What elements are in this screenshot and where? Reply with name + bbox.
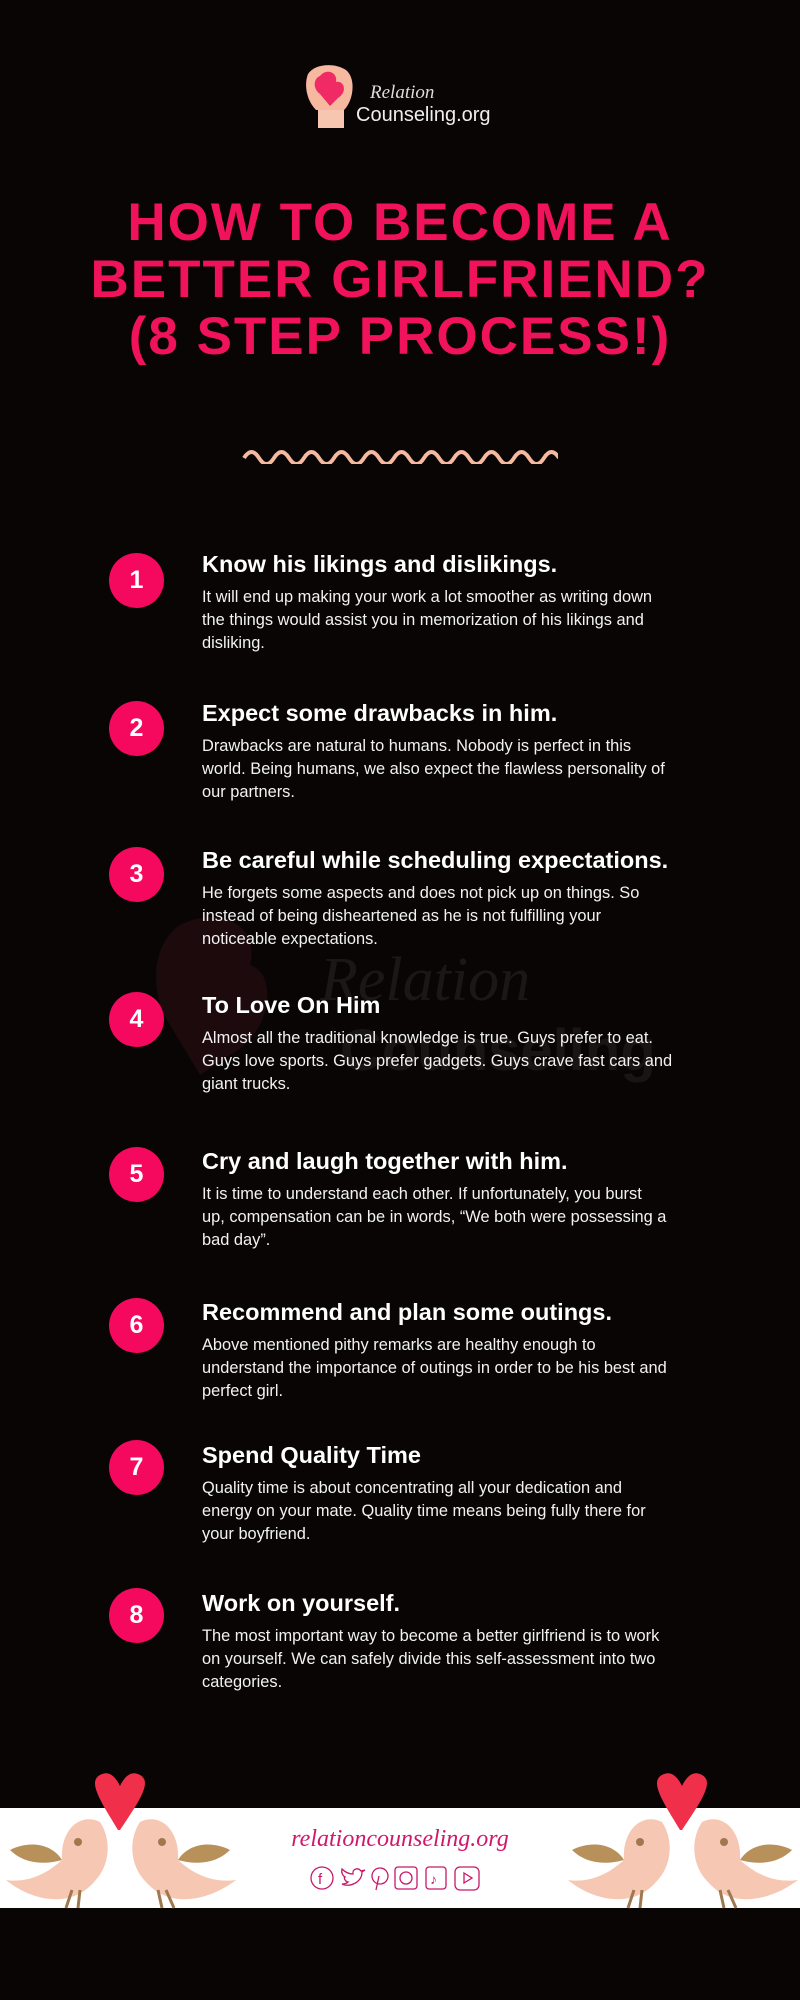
- title: BETTER GIRLFRIEND?: [90, 250, 709, 309]
- text: Work on yourself.: [202, 1590, 400, 1616]
- step 8: 8: [130, 1601, 143, 1629]
- text: To Love On Him: [202, 992, 380, 1018]
- text: It will end up making your work a lot smoother as writing down: [202, 588, 652, 606]
- text: instead of being disheartened as he is not fulfilling your: [202, 907, 601, 925]
- text: noticeable expectations.: [202, 930, 378, 948]
- step 7: [109, 1440, 164, 1495]
- text: He forgets some aspects and does not pick up on things. So: [202, 884, 639, 902]
- title: [90, 193, 709, 366]
- step 5: 5: [130, 1160, 143, 1188]
- social icons: f: [318, 1871, 323, 1888]
- text: Drawbacks are natural to humans. Nobody is perfect in this: [202, 737, 631, 755]
- social icons: ♪: [430, 1871, 437, 1887]
- watermark logo: [156, 917, 660, 1083]
- text: understand the importance of outings in order to be his best and: [202, 1359, 667, 1377]
- step 4: 4: [130, 1005, 143, 1033]
- text: categories.: [202, 1673, 282, 1691]
- footer url: relationcounseling.org: [291, 1826, 509, 1852]
- step 3: [109, 847, 164, 902]
- step 6: [109, 1298, 164, 1353]
- text: bad day”.: [202, 1231, 270, 1249]
- text: The most important way to become a better girlfriend is to work: [202, 1627, 659, 1645]
- text: Quality time is about concentrating all your dedication and: [202, 1479, 622, 1497]
- logo: Counseling.org: [356, 104, 491, 126]
- text: Almost all the traditional knowledge is true. Guys prefer to eat.: [202, 1029, 653, 1047]
- step 7: 7: [130, 1453, 143, 1481]
- text: up, compensation can be in words, “We both were possessing a: [202, 1208, 666, 1226]
- text: world. Being humans, we also expect the flawless personality of: [202, 760, 665, 778]
- footer band: [0, 1808, 800, 1908]
- step 8: [109, 1588, 164, 1643]
- birds right: [568, 1773, 798, 1909]
- logo: [306, 65, 491, 128]
- step 2: [109, 701, 164, 756]
- text: energy on your mate. Quality time means being fully there for: [202, 1502, 646, 1520]
- step 1: 1: [130, 566, 143, 594]
- text: perfect girl.: [202, 1382, 283, 1400]
- step 1: [109, 553, 164, 608]
- title: (8 STEP PROCESS!): [129, 307, 671, 366]
- text: Guys love sports. Guys prefer gadgets. Guys crave fast cars and: [202, 1052, 672, 1070]
- step 3: 3: [130, 860, 143, 888]
- text: Cry and laugh together with him.: [202, 1148, 568, 1174]
- social icons: [310, 1866, 480, 1891]
- title: HOW TO BECOME A: [127, 193, 673, 252]
- text: on yourself. We can safely divide this self-assessment into two: [202, 1650, 655, 1668]
- text: Spend Quality Time: [202, 1442, 421, 1468]
- logo: Relation: [369, 82, 434, 103]
- birds left: [6, 1773, 236, 1909]
- watermark logo: Relation: [319, 946, 530, 1014]
- text: Know his likings and dislikings.: [202, 551, 557, 577]
- icon: fist with heart: [306, 65, 353, 128]
- text: Above mentioned pithy remarks are healthy enough to: [202, 1336, 596, 1354]
- step 5: [109, 1147, 164, 1202]
- text: our partners.: [202, 783, 295, 801]
- text: giant trucks.: [202, 1075, 290, 1093]
- step 4: [109, 992, 164, 1047]
- text: Recommend and plan some outings.: [202, 1299, 612, 1325]
- text: It is time to understand each other. If unfortunately, you burst: [202, 1185, 642, 1203]
- step 6: 6: [130, 1311, 143, 1339]
- text: your boyfriend.: [202, 1525, 310, 1543]
- wavy divider: [242, 450, 558, 464]
- text: disliking.: [202, 634, 265, 652]
- text: Be careful while scheduling expectations.: [202, 847, 668, 873]
- text: the things would assist you in memorization of his likings and: [202, 611, 644, 629]
- text: Expect some drawbacks in him.: [202, 700, 557, 726]
- step 2: 2: [130, 714, 143, 742]
